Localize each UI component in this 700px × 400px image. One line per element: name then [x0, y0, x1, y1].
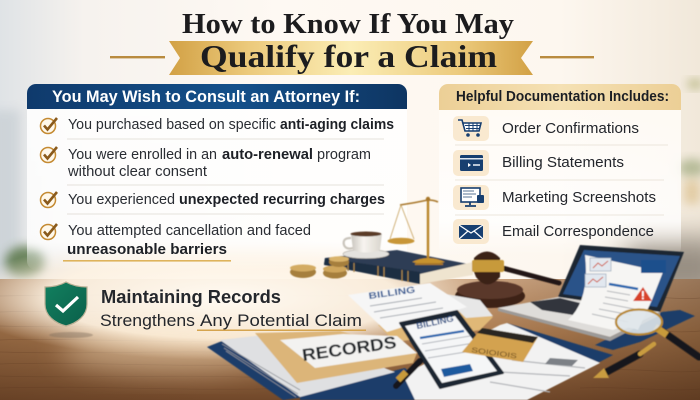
icon: monitor with screenshot — [453, 185, 489, 210]
callout text: Strengthens — [100, 311, 195, 330]
illustration: gold coins — [290, 256, 349, 278]
checklist item 2: without clear consent — [67, 164, 207, 180]
list item: order confirmations: Order Confirmations — [502, 121, 639, 137]
list item: email correspondence: Email Correspondence — [502, 224, 654, 240]
checklist item 1 — [40, 117, 394, 134]
panel header: consult an attorney: You May Wish to Consult an Attorney If: — [52, 88, 360, 106]
illustration: magnifying glass — [616, 310, 699, 357]
illustration: billing sheet — [348, 283, 493, 342]
illustration: pen on folder — [396, 361, 420, 386]
checklist item 3 — [40, 192, 385, 208]
background wall — [0, 0, 700, 298]
illustration: gavel — [455, 252, 559, 308]
checklist item 2: auto-renewal — [222, 147, 313, 163]
checklist item 1: You purchased based on specific — [68, 117, 276, 133]
illustration: billing sheet: BILLING — [368, 285, 416, 301]
checklist item 4: unreasonable barriers — [67, 242, 227, 258]
checklist item 2: You were enrolled in an — [68, 147, 217, 163]
checklist item 3: You experienced — [68, 192, 175, 208]
illustration: coffee cup — [343, 232, 389, 258]
icon: shopping cart — [453, 116, 489, 141]
icon: billing card — [453, 150, 489, 176]
callout text: Any Potential Claim — [200, 311, 362, 330]
icon: envelope — [453, 219, 489, 244]
panel: helpful documentation — [439, 84, 681, 256]
illustration: manila folder with records label — [255, 331, 417, 383]
callout: maintaining records — [45, 282, 366, 338]
icon: green shield — [45, 282, 93, 338]
panel: consult an attorney — [27, 84, 407, 270]
list item: billing statements: Billing Statements — [502, 155, 624, 171]
list item: marketing screenshots: Marketing Screenshots — [502, 190, 656, 206]
callout text: Maintaining Records — [101, 287, 281, 307]
illustration: stacked papers — [220, 323, 600, 400]
wooden table — [0, 236, 700, 400]
illustration: gold card — [462, 328, 538, 362]
illustration: report with warning sign — [568, 255, 666, 330]
checklist item 2 — [40, 147, 371, 180]
panel header: helpful documentation — [439, 84, 681, 110]
checklist item 4: You attempted cancellation and faced — [68, 223, 311, 239]
illustration: fountain pen — [593, 344, 654, 378]
ribbon side rule: left — [110, 56, 165, 58]
title line 1: How to Know If You May — [182, 8, 515, 40]
panel header: helpful documentation: Helpful Documentation Includes: — [456, 89, 669, 105]
illustration: tablet showing billing: BILLING — [415, 313, 455, 331]
checklist item 1: anti-aging claims — [280, 117, 394, 133]
illustration: scales of justice — [388, 197, 445, 265]
checklist item 3: unexpected recurring charges — [179, 192, 385, 208]
callout text — [100, 287, 366, 331]
illustration: dark blue folder — [207, 323, 613, 400]
illustration: laptop — [498, 245, 695, 350]
illustration: manila folder with records label: RECORDS — [301, 333, 398, 365]
illustration: tablet showing billing — [400, 311, 503, 388]
ribbon side rule: right — [540, 56, 594, 58]
checklist item 2: program — [317, 147, 371, 163]
checklist item 4 — [40, 223, 311, 262]
panel header: consult an attorney — [27, 84, 407, 109]
illustration: law books — [324, 250, 473, 284]
title ribbon — [169, 38, 533, 75]
title line 2: Qualify for a Claim — [200, 38, 497, 74]
illustration: gold card: SOIOIOIS — [471, 347, 518, 360]
